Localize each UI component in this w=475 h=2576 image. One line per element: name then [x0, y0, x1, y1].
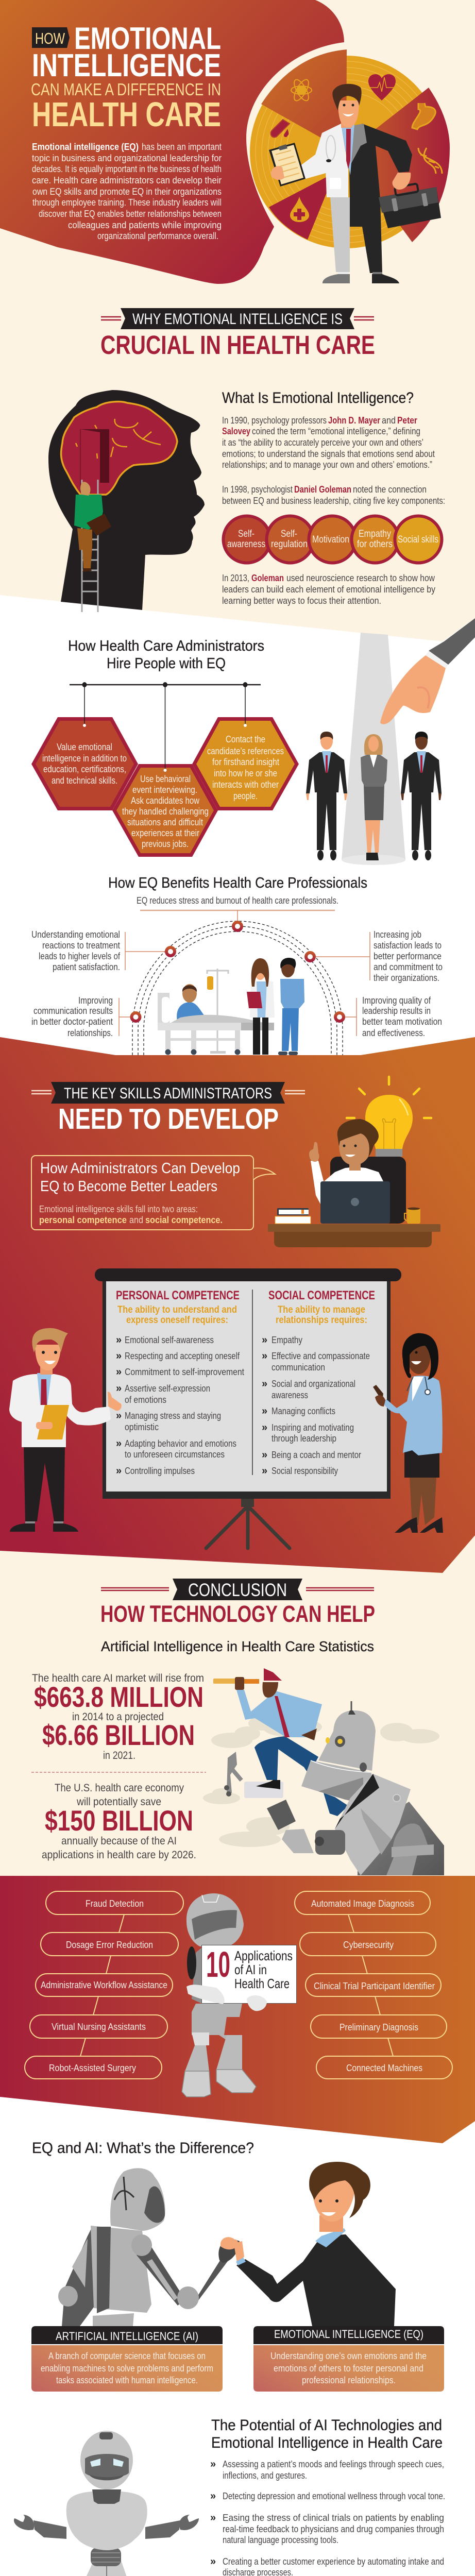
hexagon: behavioral interviewing: Use behavioral: [140, 774, 191, 784]
statistics heading: Artificial Intelligence in Health Care Statistics: [101, 1638, 374, 1654]
hexagon: contact references: candidate’s references: [207, 746, 284, 756]
personal competence column: »: [116, 1334, 122, 1346]
personal competence column: Respecting and accepting oneself: [125, 1351, 240, 1361]
woman at laptop: [268, 1119, 440, 1247]
statistic: annual savings: will potentially save: [76, 1796, 161, 1808]
social competence column: Being a coach and mentor: [272, 1450, 361, 1460]
benefit: job satisfaction: their organizations.: [374, 973, 439, 983]
social competence column: through leadership: [272, 1433, 336, 1444]
personal competence column: of emotions: [125, 1395, 166, 1405]
social competence column: Empathy: [272, 1335, 302, 1345]
white band: hiring and benefits: [0, 595, 475, 1082]
robot hand platform: [244, 1782, 283, 1798]
bullet list: Easing the stress of clinical trials on patients by enabling: [223, 2513, 444, 2523]
personal competence column: »: [116, 1350, 122, 1362]
man upper body: [236, 1690, 322, 1737]
benefit: communication: relationships.: [67, 1028, 113, 1038]
speech box: social competence.: [145, 1215, 223, 1225]
speech box: Emotional intelligence skills fall into two areas:: [39, 1204, 198, 1214]
heading: Hire People with EQ: [107, 655, 226, 672]
personal competence column: PERSONAL COMPETENCE: [116, 1289, 240, 1302]
bullet list: »: [210, 2459, 216, 2470]
right application pills: Clinical Trial Participant Identifier: [314, 1981, 435, 1991]
standing robot: [14, 2431, 199, 2576]
statistic: annual savings: applications in health care by 2026.: [42, 1849, 196, 1861]
personal competence column: »: [116, 1366, 122, 1378]
social competence column: »: [262, 1378, 267, 1389]
man on giant robot: [203, 1668, 444, 1875]
bullet list: inflections, and gestures.: [223, 2470, 307, 2481]
statistic: annual savings: annually because of the AI: [61, 1835, 177, 1847]
intro text: discover that EQ enables better relationships between: [39, 209, 222, 219]
connector lines: [119, 910, 370, 1036]
hexagon: value EQ: Value emotional: [57, 742, 112, 752]
benefit: job satisfaction: better performance: [374, 951, 442, 961]
panel background: [0, 1037, 475, 1573]
benefit: communication: Improving: [78, 995, 113, 1006]
head silhouette with brain and door: [48, 390, 205, 612]
personal competence column: Assertive self-expression: [125, 1383, 210, 1394]
hexagon: behavioral interviewing: Ask candidates how: [131, 795, 200, 806]
hexagon: behavioral interviewing: [112, 685, 218, 857]
personal competence column: Commitment to self-improvement: [125, 1367, 244, 1377]
intro text: has been an important: [142, 142, 222, 152]
personal competence column: The ability to understand and: [117, 1304, 237, 1315]
hexagon: value EQ: education, certifications,: [43, 764, 126, 774]
social competence column: »: [262, 1334, 267, 1346]
benefit: communication: in better doctor-patient: [31, 1016, 113, 1027]
hexagon: contact references: interacts with other: [212, 779, 279, 790]
definition paragraph: [222, 415, 435, 470]
statistic: market growth: The health care AI market will rise from: [32, 1672, 204, 1684]
door: [80, 429, 109, 483]
woman climbing: [74, 482, 111, 572]
lightbulb: [347, 1077, 431, 1157]
robot holding sign: [182, 1893, 297, 2097]
projector screen: [95, 1268, 401, 1548]
five components circles: [224, 516, 442, 563]
panel: what is emotional intelligence: [222, 389, 445, 606]
intro text: care. Health care administrators can develop their: [32, 175, 222, 185]
social competence column: Effective and compassionate: [272, 1351, 370, 1361]
cyborg handshake figure: [58, 2168, 240, 2326]
component labels: regulation: [271, 539, 308, 550]
speech box: How Administrators Can Develop: [40, 1160, 240, 1177]
component labels: Motivation: [312, 534, 349, 545]
panel: key skills: [0, 1037, 475, 1573]
2013 paragraph: Goleman: [251, 573, 284, 583]
section header: NEED TO DEVELOP: [58, 1103, 279, 1136]
heading: [211, 2417, 443, 2451]
section header: why EQ is crucial: [100, 308, 375, 360]
benefit: job satisfaction: satisfaction leads to: [374, 940, 442, 951]
candidate: right man: [401, 732, 442, 860]
right application pills: Cybersecurity: [343, 1940, 394, 1950]
intro text: through employee training. These industry leaders will: [32, 197, 222, 208]
left application pills: Virtual Nursing Assistants: [52, 2022, 146, 2032]
Goleman paragraph: Daniel Goleman: [294, 484, 351, 495]
hexagon: contact references: [192, 685, 299, 810]
spotlight: [342, 633, 405, 865]
bullet list: »: [210, 2512, 216, 2523]
desk: [268, 1224, 440, 1247]
hexagon: contact references: Contact the: [226, 734, 265, 744]
intro text: Emotional intelligence (EQ): [32, 142, 139, 152]
brain: [61, 402, 177, 495]
personal competence column: Controlling impulses: [125, 1466, 195, 1476]
robot body: [358, 1802, 444, 1875]
Goleman paragraph: noted the connection: [353, 484, 427, 495]
shoe: [256, 1780, 280, 1789]
box: emotional intelligence: EMOTIONAL INTELLIGENCE (EQ): [274, 2328, 423, 2341]
subheading: EQ reduces stress and burnout of health care professionals.: [137, 895, 338, 906]
intro text: own EQ skills and promote EQ in their organizations: [32, 187, 222, 197]
2013 paragraph: In 2013,: [222, 573, 249, 583]
intro text: decades. It is equally important in the business of health: [32, 164, 222, 174]
right application pills: Preliminary Diagnosis: [340, 2022, 418, 2032]
heading: What Is Emotional Intelligence?: [222, 389, 414, 406]
personal competence column: optimistic: [125, 1422, 159, 1432]
statistic: market growth: $663.8 MILLION: [34, 1681, 203, 1713]
bullet list: natural language processing tools.: [223, 2535, 338, 2545]
definition paragraph: emotions; to understand the signals that emotions send about: [222, 449, 435, 459]
box: artificial intelligence: [31, 2326, 223, 2392]
statistic: market growth: [32, 1672, 204, 1761]
robot arm: [267, 1800, 296, 1830]
benefit: communication: communication results: [33, 1006, 113, 1016]
definition paragraph: relationships; and to manage your own and others’ emotions.”: [222, 460, 432, 470]
benefit: patient satisfaction: leads to higher levels of: [39, 951, 121, 961]
hero panel: [0, 0, 450, 284]
benefit: patient satisfaction: reactions to treatment: [42, 940, 120, 951]
heading: How EQ Benefits Health Care Professionals: [108, 875, 367, 891]
definition paragraph: In 1990, psychology professors: [222, 415, 327, 426]
component labels: Self-: [238, 529, 255, 539]
benefit: leadership: [362, 995, 442, 1038]
title: CAN MAKE A DIFFERENCE IN: [31, 80, 221, 99]
icon: stomach: [412, 103, 435, 129]
icon: test tube: [270, 120, 290, 138]
social competence column: Managing conflicts: [272, 1406, 335, 1416]
Goleman paragraph: [222, 484, 445, 506]
left application pills: Dosage Error Reduction: [66, 1940, 153, 1950]
statistic: market growth: in 2021.: [103, 1750, 135, 1761]
benefit: leadership: and effectiveness.: [362, 1028, 425, 1038]
title: HEALTH CARE: [32, 95, 221, 134]
hexagon: behavioral interviewing: situations and difficult: [127, 817, 203, 827]
sign: of AI in: [234, 1962, 267, 1977]
left application pills: Administrative Workflow Assistance: [41, 1980, 167, 1990]
personal competence column: Adapting behavior and emotions: [125, 1438, 236, 1449]
social competence column: The ability to manage: [278, 1304, 365, 1315]
section header: conclusion: CONCLUSION: [188, 1580, 287, 1600]
2013 paragraph: [222, 573, 435, 606]
right application pills: Automated Image Diagnosis: [311, 1899, 414, 1909]
speech box: and: [129, 1215, 143, 1225]
component labels: Empathy: [359, 529, 391, 539]
hospital scene: [158, 958, 304, 1055]
component labels: [227, 529, 438, 550]
bullet list: »: [210, 2556, 216, 2567]
sign: Health Care: [234, 1976, 290, 1991]
candidate: left man: [306, 732, 347, 860]
section header: conclusion: HOW TECHNOLOGY CAN HELP: [100, 1601, 375, 1627]
female doctor presenter: [373, 1333, 443, 1533]
hexagon: behavioral interviewing: event interviewing.: [132, 785, 197, 795]
clouds: [203, 1716, 439, 1847]
title: [31, 21, 221, 134]
definition paragraph: it as “the ability to accurately perceive your own and others’: [222, 437, 423, 448]
benefit: job satisfaction: and commitment to: [374, 962, 443, 972]
heading: The Potential of AI Technologies and: [211, 2417, 442, 2434]
hexagon: value EQ: [31, 685, 138, 810]
icon: atom: [291, 78, 312, 103]
benefit: patient satisfaction: [31, 929, 121, 972]
social competence column: »: [262, 1350, 267, 1362]
ladder: [82, 480, 98, 612]
title: EMOTIONAL: [74, 21, 221, 56]
speech box: personal competence: [39, 1215, 127, 1225]
icon: DNA: [418, 148, 442, 174]
social competence column: communication: [272, 1362, 325, 1372]
section header: [31, 1082, 305, 1136]
personal competence column: to unforeseen circumstances: [125, 1449, 225, 1460]
box: artificial intelligence: tasks associated with human intelligence.: [56, 2375, 198, 2385]
social competence column: »: [262, 1405, 267, 1417]
man legs: [324, 1793, 348, 1816]
benefit: leadership: leadership results in: [362, 1006, 431, 1016]
right application pills: Connected Machines: [346, 2063, 422, 2073]
benefit: job satisfaction: Increasing job: [374, 929, 421, 940]
panel: how administrators hire: [31, 618, 475, 865]
hexagon: value EQ: intelligence in addition to: [42, 753, 127, 764]
benefit: patient satisfaction: Understanding emotional: [31, 929, 120, 940]
social competence column: Social responsibility: [272, 1466, 338, 1476]
pointing hand: [380, 618, 475, 724]
Goleman paragraph: In 1998, psychologist: [222, 484, 293, 495]
section header: THE KEY SKILLS ADMINISTRATORS: [64, 1085, 272, 1102]
heading: How Health Care Administrators: [68, 638, 264, 654]
title badge: how: HOW: [35, 29, 65, 47]
social competence column: Social and organizational: [272, 1379, 355, 1389]
definition paragraph: and: [382, 415, 396, 426]
social competence column: Inspiring and motivating: [272, 1422, 354, 1433]
component labels: Social skills: [398, 534, 438, 545]
component labels: for others: [357, 539, 393, 550]
hexagon: contact references: for firsthand insight: [212, 757, 279, 767]
social competence column: [262, 1289, 375, 1477]
box: artificial intelligence: A branch of computer science that focuses on: [48, 2351, 206, 2361]
sign: [202, 1944, 297, 2003]
right application pills: [295, 1891, 452, 2079]
hanging beam: [70, 682, 261, 687]
social competence column: SOCIAL COMPETENCE: [268, 1289, 375, 1302]
panel: potential of AI and EQ: [210, 2417, 445, 2576]
personal competence column: »: [116, 1410, 122, 1421]
hexagon: value EQ: and technical skills.: [52, 775, 117, 786]
intro text: colleagues and patients while improving: [68, 220, 222, 230]
heading: Emotional Intelligence in Health Care: [211, 2434, 443, 2451]
box: emotional intelligence: Understanding one’s own emotions and the: [270, 2351, 427, 2361]
statistic: annual savings: [42, 1782, 196, 1861]
section header: conclusion: [100, 1579, 375, 1627]
2013 paragraph: learning better ways to focus their attention.: [222, 596, 381, 606]
icon: heart: [368, 74, 396, 100]
section header: why EQ is crucial: WHY EMOTIONAL INTELLIGENCE IS: [132, 311, 343, 328]
component labels: awareness: [227, 539, 265, 550]
arcs: [132, 921, 343, 1055]
statistic: market growth: $6.66 BILLION: [42, 1719, 195, 1751]
bullet list: real-time feedback to physicians and drug companies through: [223, 2524, 444, 2534]
hexagon: behavioral interviewing: experiences at their: [131, 828, 199, 838]
bullet list: [210, 2459, 445, 2576]
definition paragraph: Salovey: [222, 426, 250, 436]
intro text: [32, 142, 222, 241]
icon: blood drop: [290, 197, 309, 222]
component labels: Self-: [281, 529, 297, 539]
personal competence column: »: [116, 1383, 122, 1394]
white band: EQ and AI: [0, 2061, 475, 2576]
definition paragraph: Peter: [397, 415, 417, 426]
panel: 10 applications of AI: [0, 1876, 475, 2143]
2013 paragraph: used neuroscience research to show how: [286, 573, 435, 583]
sign: 10: [206, 1944, 230, 1985]
woman handshake figure: [220, 2162, 396, 2326]
male doctor presenter: [9, 1328, 122, 1532]
personal competence column: [116, 1289, 244, 1477]
speech box: [31, 1156, 275, 1230]
box: artificial intelligence: enabling machines to solve problems and perform: [41, 2363, 213, 2374]
panel: EQ vs AI: [31, 2140, 444, 2392]
left application pills: [25, 1891, 183, 2079]
hexagon: contact references: people.: [233, 791, 258, 801]
box: emotional intelligence: professional relationships.: [302, 2375, 396, 2385]
robot shoulder plate: [335, 1774, 411, 1875]
connector rings: [132, 922, 344, 1021]
social competence column: »: [262, 1449, 267, 1461]
personal competence column: »: [116, 1465, 122, 1477]
speech box: EQ to Become Better Leaders: [40, 1178, 217, 1195]
left application pills: Fraud Detection: [86, 1899, 144, 1909]
left application pills: Robot-Assisted Surgery: [49, 2063, 136, 2073]
personal competence column: express oneself requires:: [126, 1315, 228, 1326]
personal competence column: »: [116, 1438, 122, 1449]
2013 paragraph: leaders can build each element of emotional intelligence by: [222, 584, 435, 595]
section header: why EQ is crucial: CRUCIAL IN HEALTH CARE: [100, 330, 375, 360]
robot head: [318, 1710, 376, 1771]
panel: how EQ benefits professionals: [31, 875, 443, 1055]
social competence column: awareness: [272, 1390, 308, 1400]
statistic: market growth: in 2014 to a projected: [72, 1711, 164, 1723]
candidate: woman in spotlight: [361, 734, 387, 860]
benefit: leadership: Improving quality of: [362, 995, 431, 1006]
social competence column: »: [262, 1422, 267, 1433]
intro text: organizational performance overall.: [97, 231, 218, 241]
doctor and administrator figure: [269, 84, 441, 283]
intro text: topic in business and organizational leadership for: [32, 153, 222, 163]
statistic: annual savings: The U.S. health care economy: [55, 1782, 184, 1794]
heading: EQ and AI: What’s the Difference?: [32, 2140, 254, 2157]
benefit: patient satisfaction: patient satisfaction.: [53, 962, 120, 972]
benefit: leadership: better team motivation: [362, 1016, 442, 1027]
personal competence column: Emotional self-awareness: [125, 1335, 214, 1345]
heading: [68, 638, 264, 672]
title: INTELLIGENCE: [32, 48, 221, 83]
hexagon: contact references: into how he or she: [214, 768, 277, 778]
statistic: annual savings: $150 BILLION: [45, 1804, 193, 1837]
hexagon: behavioral interviewing: they handled challenging: [122, 806, 209, 817]
personal competence column: Managing stress and staying: [125, 1411, 221, 1421]
sign: Applications: [234, 1948, 293, 1963]
medical wheel: [250, 49, 450, 248]
panel background: [0, 1876, 475, 2143]
hero background shape: [0, 0, 344, 284]
definition paragraph: John D. Mayer: [328, 415, 380, 426]
social competence column: »: [262, 1465, 267, 1477]
hexagon: behavioral interviewing: previous jobs.: [142, 839, 189, 849]
social competence column: relationships requires:: [276, 1315, 367, 1326]
pill connectors: [80, 1914, 393, 2056]
box: emotional intelligence: emotions of others to foster personal and: [274, 2363, 423, 2374]
definition paragraph: coined the term “emotional intelligence,” defining: [252, 426, 420, 436]
box: emotional intelligence: [253, 2326, 444, 2392]
box: artificial intelligence: ARTIFICIAL INTELLIGENCE (AI): [56, 2330, 198, 2343]
benefit: job satisfaction: [374, 929, 443, 983]
benefit: communication: [31, 995, 113, 1038]
bullet list: »: [210, 2490, 216, 2502]
